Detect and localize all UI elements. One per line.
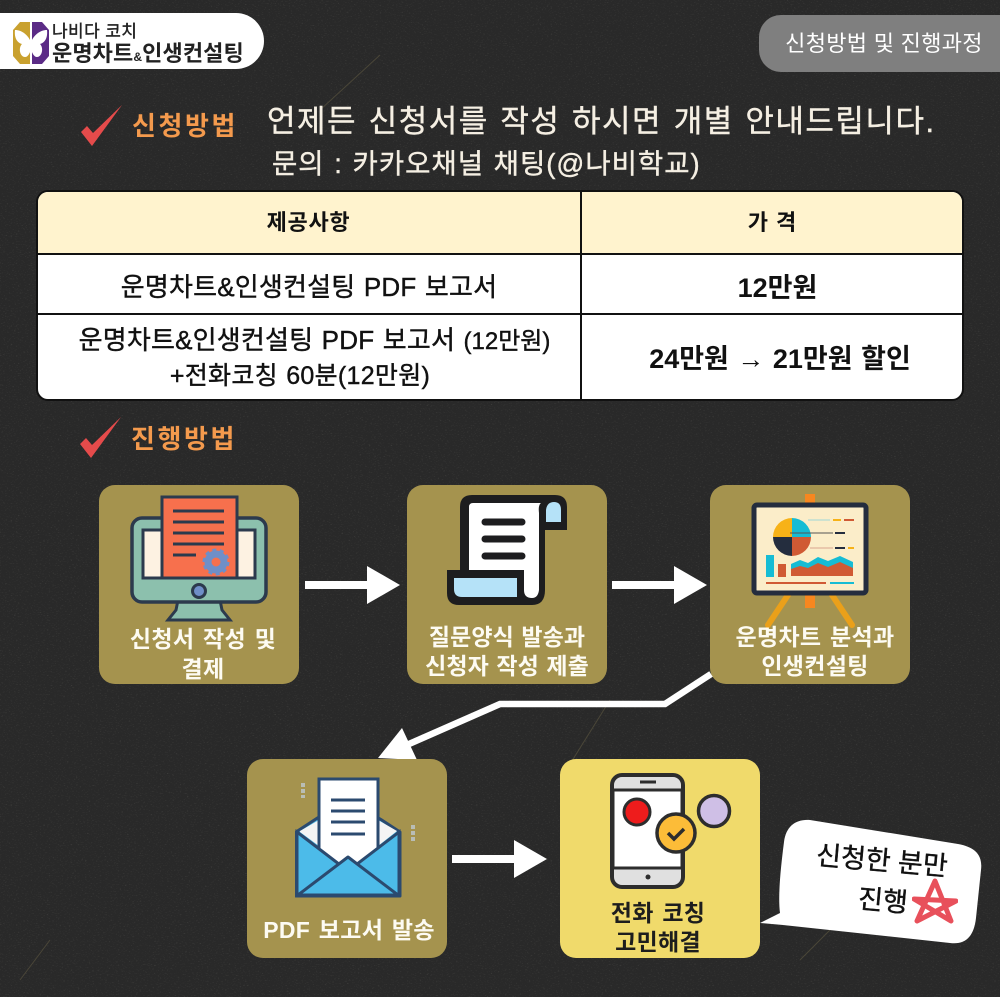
logo banner: 운명차트&인생컨설팅	[52, 41, 244, 66]
top right tag	[759, 15, 1000, 72]
label: 전화 코칭	[611, 900, 705, 926]
icon: check mark 2	[80, 417, 121, 458]
top right tag: 신청방법 및 진행과정	[785, 31, 983, 56]
arrow 1	[305, 566, 400, 604]
application note: 언제든 신청서를 작성 하시면 개별 안내드립니다.	[267, 104, 936, 139]
label: PDF 보고서 발송	[263, 917, 435, 943]
price table: 운명차트&인생컨설팅 PDF 보고서 (12만원)	[79, 325, 550, 355]
bubble text: 신청한 분만	[815, 840, 949, 882]
table header	[38, 192, 962, 255]
price table: 24만원 → 21만원 할인	[649, 344, 911, 374]
contact: 문의 : 카카오채널 채팅(@나비학교)	[272, 148, 701, 179]
price table: 운명차트&인생컨설팅 PDF 보고서	[121, 272, 497, 302]
label	[425, 624, 589, 679]
label: 질문양식 발송과	[429, 624, 585, 650]
label: 고민해결	[615, 929, 701, 955]
icon: butterfly logo	[13, 22, 49, 64]
arrow 4	[452, 840, 547, 878]
label: 인생컨설팅	[761, 653, 869, 679]
step 1	[99, 485, 299, 684]
step 5	[560, 759, 760, 958]
price table: 12만원	[738, 273, 817, 303]
speech bubble	[760, 820, 982, 944]
dots right of envelope	[411, 825, 415, 841]
arrow 2	[612, 566, 707, 604]
icon: presentation board	[752, 494, 868, 628]
icon: scroll	[447, 495, 567, 605]
label	[611, 900, 705, 955]
label: 운명차트 분석과	[736, 624, 894, 650]
icon: monitor and document	[130, 496, 268, 622]
step 3	[710, 485, 910, 684]
price table: 제공사항	[267, 210, 350, 235]
speech bubble: 진행	[857, 884, 909, 918]
label: 결제	[182, 656, 224, 682]
logo banner	[0, 13, 264, 69]
step 4	[247, 759, 447, 958]
price table: 가 격	[748, 210, 796, 235]
heading: process: 진행방법	[131, 424, 237, 454]
label: 신청자 작성 제출	[425, 653, 589, 679]
label	[130, 626, 276, 682]
arrow 3: connector	[378, 671, 713, 759]
logo text: 나비다 코치	[52, 22, 137, 41]
icon: phone with check	[610, 773, 732, 889]
heading: application method: 신청방법	[132, 111, 238, 141]
icon: check mark 1	[81, 105, 122, 146]
price table: +전화코칭 60분(12만원)	[170, 362, 430, 390]
label: 신청서 작성 및	[130, 626, 276, 652]
step 2	[407, 485, 607, 684]
icon: envelope	[295, 778, 402, 898]
price table	[36, 190, 964, 401]
label	[736, 624, 894, 679]
icon: hand-drawn star	[912, 878, 958, 924]
